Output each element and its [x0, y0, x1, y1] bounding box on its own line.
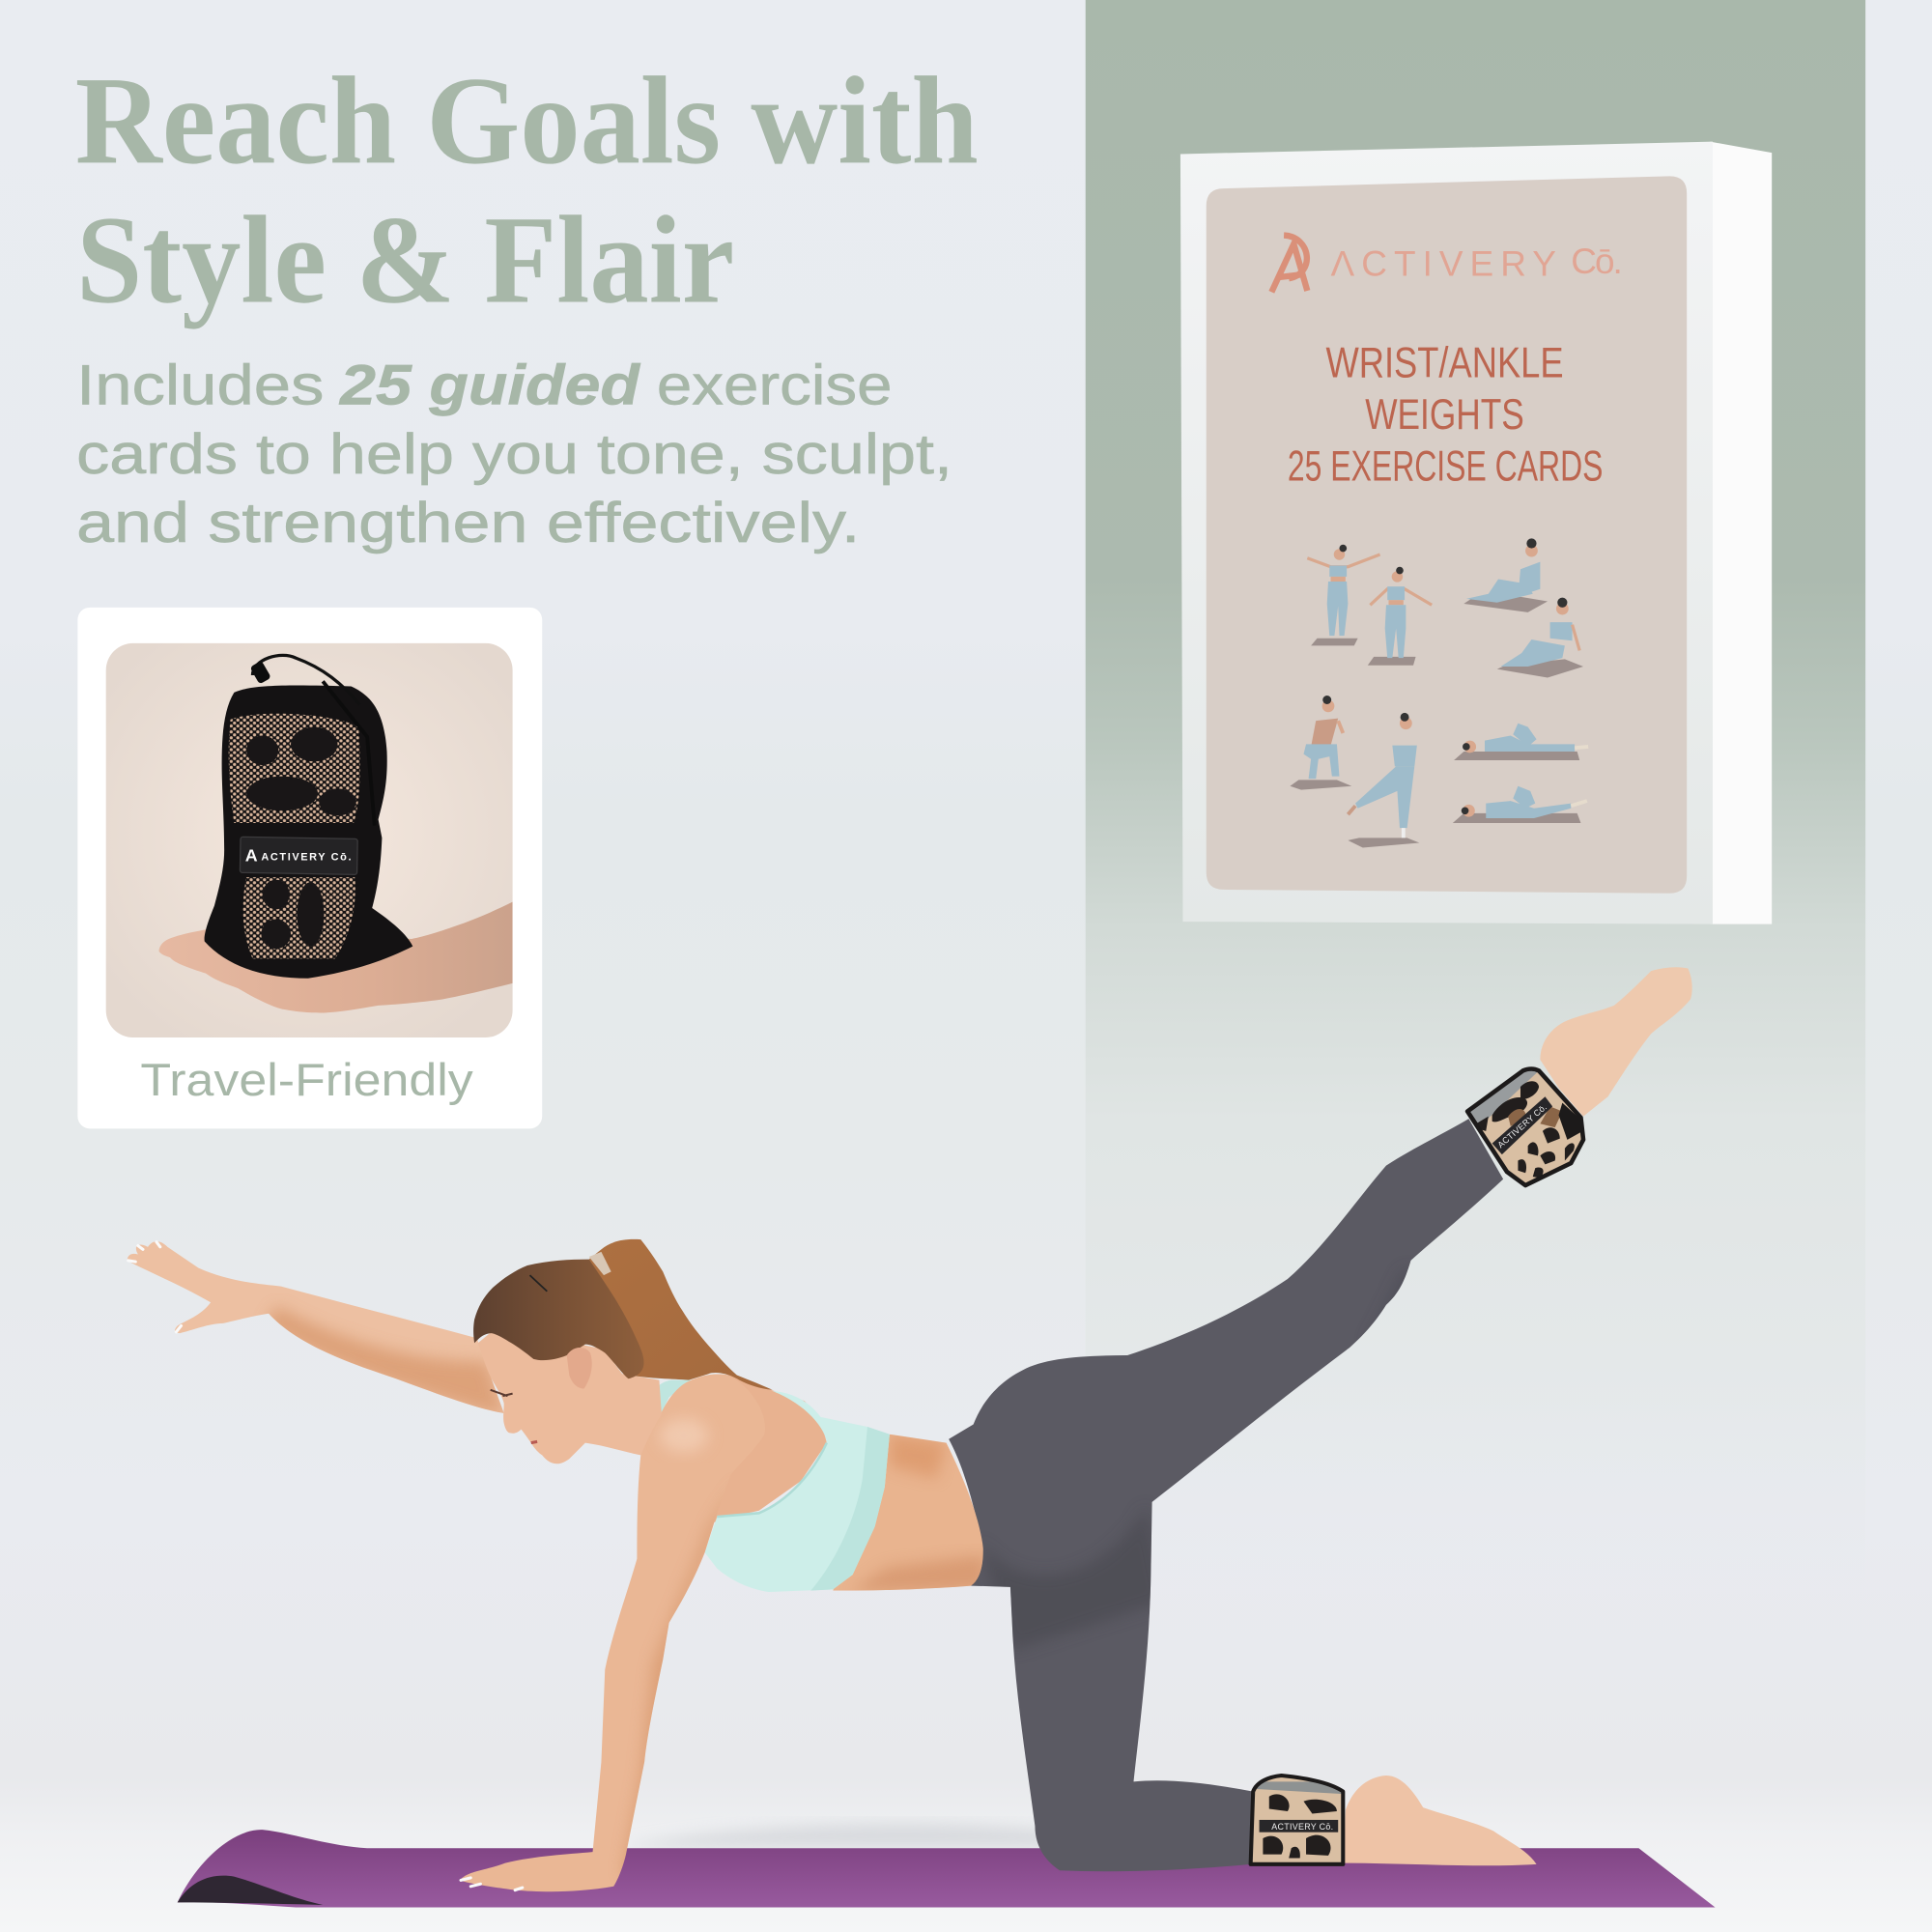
text block: description: cards to help you tone, sculpt, — [76, 423, 952, 486]
midriff — [833, 1434, 983, 1590]
hand holding the bag — [159, 902, 513, 1012]
face details — [491, 1390, 513, 1396]
head and neck — [478, 1331, 662, 1463]
brand logo — [1271, 236, 1623, 292]
bag label: ACTIVERY Cō. — [261, 851, 352, 863]
text block: description: 25 guided — [339, 354, 640, 416]
floor shadow — [616, 1824, 1060, 1848]
head hair — [473, 1260, 643, 1378]
bag label: A — [245, 846, 258, 866]
ear — [567, 1348, 592, 1389]
mesh bag — [205, 655, 412, 979]
athlete figure — [124, 967, 1692, 1897]
extended arm — [124, 1233, 511, 1417]
leg and hips in grey leggings — [936, 1109, 1516, 1886]
back and shoulder skin — [659, 1375, 827, 1528]
lower ankle weight: ACTIVERY Cō. — [1271, 1822, 1333, 1832]
photo background — [106, 643, 513, 1037]
yoga mat — [178, 1830, 1716, 1907]
caption: Travel-Friendly — [140, 1055, 473, 1106]
raised ankle weight: ACTIVERY Cō. — [1495, 1102, 1548, 1150]
title: Reach Goals with — [75, 51, 979, 190]
raised foot — [1540, 967, 1692, 1117]
text block: description: and strengthen effectively. — [76, 492, 860, 554]
bag label — [240, 837, 357, 874]
text block: description: exercise — [657, 354, 892, 416]
lower ankle weight — [1248, 1774, 1345, 1866]
sports bra — [657, 1380, 890, 1592]
raised ankle weight — [1464, 1066, 1586, 1188]
card cover — [1207, 176, 1687, 894]
ponytail hair — [589, 1239, 773, 1390]
text block: description — [76, 354, 952, 554]
hair pin — [529, 1275, 547, 1292]
lower foot — [1343, 1776, 1537, 1865]
card title: WEIGHTS — [1365, 391, 1524, 439]
card title: WRIST/ANKLE — [1325, 339, 1564, 386]
box front — [1180, 142, 1713, 924]
title — [75, 51, 979, 329]
box side — [1710, 142, 1772, 924]
panel: exercise cards box — [1180, 142, 1772, 924]
brand logo: ΛCTIVERY — [1331, 244, 1556, 284]
fingernails — [128, 1242, 523, 1890]
card title — [1288, 339, 1603, 490]
exercise illustrations — [1290, 538, 1588, 848]
title: Style & Flair — [76, 190, 734, 329]
text block: description: Includes — [76, 354, 324, 416]
card title: 25 EXERCISE CARDS — [1288, 442, 1603, 490]
panel: travel-friendly card — [77, 608, 542, 1128]
brand logo: Cō. — [1571, 242, 1623, 281]
hair tie — [589, 1252, 611, 1275]
supporting arm and shoulder — [461, 1374, 724, 1891]
panel: sage green backdrop — [1086, 0, 1865, 1602]
